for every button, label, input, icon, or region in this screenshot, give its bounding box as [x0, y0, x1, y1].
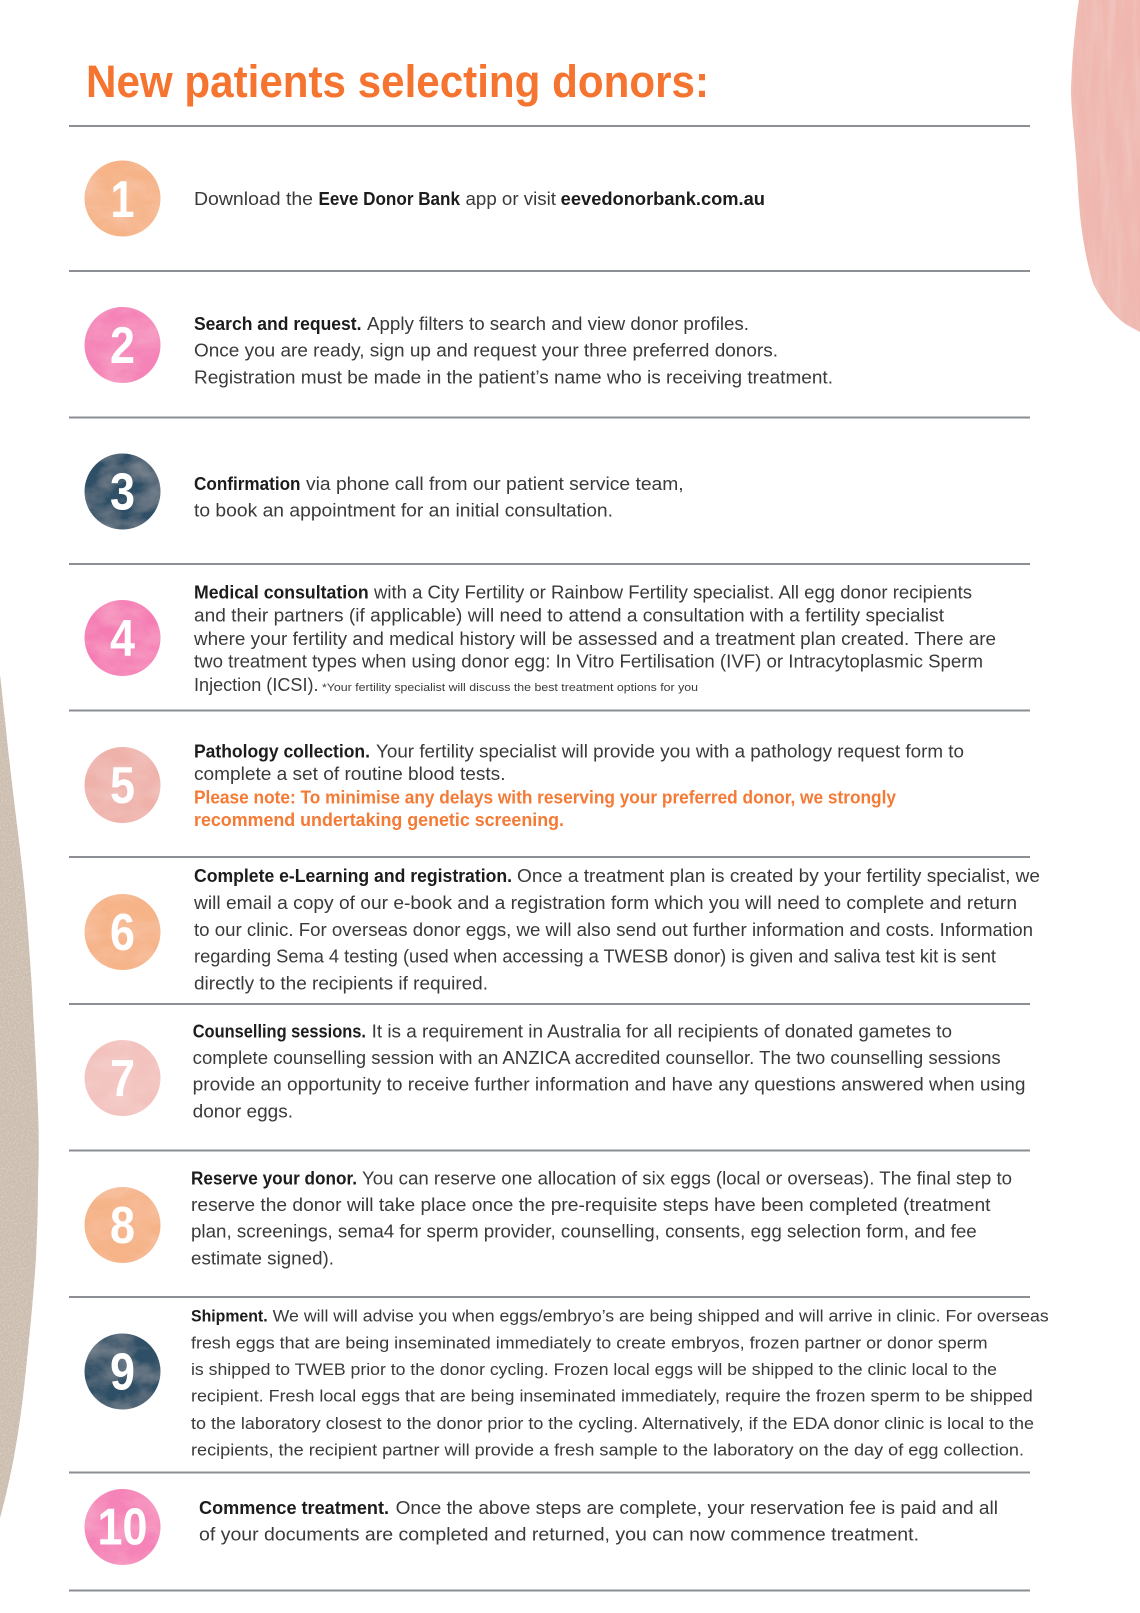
icon: number 2 badge [84, 307, 160, 383]
icon: number 4 badge [84, 600, 160, 676]
text block: step 9 shipment: Shipment. [191, 1306, 268, 1325]
icon: number 5 badge [84, 747, 160, 823]
text block: step 5 pathology collection: Pathology collection. [194, 741, 370, 761]
text block: step 2 search and request: Search and request. [194, 314, 362, 334]
panel: step 8 [84, 1168, 1012, 1268]
text block: step 7 counselling sessions: It is a requirement in Australia for all recipients of donated gametes to [372, 1021, 952, 1041]
text block: step 5 pathology collection [194, 741, 964, 830]
background shape: pink blob top right [1071, 0, 1140, 332]
text block: step 6 e-learning and registration [193, 866, 1040, 993]
icon: number 7 badge [84, 1040, 160, 1116]
text block: step 1 download [194, 189, 765, 209]
text block: step 6 e-learning and registration: regarding Sema 4 testing (used when accessing a TWESB donor) is given and saliva test kit is sent [194, 947, 996, 967]
text block: step 10 commence treatment: Commence treatment. [199, 1498, 389, 1518]
icon: number 4 badge: 4 [110, 610, 135, 668]
text block: step 4 medical consultation: Medical consultation [194, 582, 369, 602]
panel: step 6 [84, 866, 1040, 993]
text block: step 8 reserve your donor: estimate signed). [191, 1248, 334, 1268]
text block: step 6 e-learning and registration: to our clinic. For overseas donor eggs, we will also send out further information and costs. Information [194, 920, 1033, 940]
text block: step 9 shipment: recipient. Fresh local eggs that are being inseminated immediately, require the frozen sperm to be shipped [191, 1387, 1033, 1406]
text block: step 4 medical consultation: with a City Fertility or Rainbow Fertility specialist. All egg donor recipients [373, 582, 972, 602]
text block: step 4 medical consultation: *Your fertility specialist will discuss the best treatment options for you [322, 682, 698, 694]
title: New patients selecting donors: [86, 56, 709, 107]
text block: step 7 counselling sessions: provide an opportunity to receive further information and have any questions answered when using [193, 1075, 1025, 1095]
icon: number 3 badge: 3 [110, 464, 135, 522]
text block: step 5 pathology collection: Your fertility specialist will provide you with a pathology request form to [376, 741, 964, 761]
panel: step 9 [84, 1306, 1049, 1460]
text block: step 2 search and request: Once you are ready, sign up and request your three preferred donors. [194, 341, 778, 361]
text block: step 2 search and request: Apply filters to search and view donor profiles. [367, 314, 749, 334]
text block: step 3 confirmation: via phone call from our patient service team, [306, 474, 684, 494]
icon: number 10 badge: 10 [98, 1498, 148, 1556]
text block: step 2 search and request [194, 314, 833, 388]
text block: step 7 counselling sessions [193, 1021, 1025, 1121]
panel: step 10 [84, 1489, 998, 1565]
text block: step 6 e-learning and registration: Once a treatment plan is created by your fertility specialist, we [517, 866, 1040, 886]
text block: step 1 download: Eeve Donor Bank [318, 189, 461, 209]
callout: genetic screening note: Please note: To minimise any delays with reserving your preferred donor, we strongly [194, 787, 896, 807]
callout: genetic screening note: recommend undertaking genetic screening. [194, 810, 564, 830]
text block: step 8 reserve your donor: You can reserve one allocation of six eggs (local or overseas). The final step to [362, 1168, 1012, 1188]
text block: step 3 confirmation: to book an appointment for an initial consultation. [194, 501, 613, 521]
panel: step 1 [84, 160, 765, 236]
text block: step 9 shipment: recipients, the recipient partner will provide a fresh sample to the laboratory on the day of egg collection. [191, 1441, 1024, 1460]
icon: number 5 badge: 5 [110, 757, 135, 815]
text block: step 6 e-learning and registration: Complete e-Learning and registration. [194, 866, 512, 886]
text block: step 6 e-learning and registration: will email a copy of our e-book and a registration form which you will need to complete and return [193, 893, 1017, 913]
text block: step 7 counselling sessions: complete counselling session with an ANZICA accredited counsellor. The two counselling sessions [193, 1048, 1001, 1068]
text block: step 9 shipment: We will will advise you when eggs/embryo’s are being shipped and will arrive in clinic. For overseas [273, 1306, 1049, 1325]
icon: number 9 badge [84, 1334, 160, 1410]
icon: number 8 badge [84, 1187, 160, 1263]
icon: number 7 badge: 7 [110, 1050, 135, 1108]
text block: step 6 e-learning and registration: directly to the recipients if required. [194, 973, 488, 993]
text block: step 7 counselling sessions: Counselling sessions. [193, 1021, 366, 1041]
text block: step 10 commence treatment: Once the above steps are complete, your reservation fee is paid and all [396, 1498, 998, 1518]
text block: step 1 download: app or visit [466, 189, 556, 209]
text block: step 9 shipment: fresh eggs that are being inseminated immediately to create embryos, frozen partner or donor sperm [191, 1333, 988, 1352]
icon: number 8 badge: 8 [110, 1197, 135, 1255]
background shape: beige blob left edge [0, 675, 39, 1518]
panel: step 5 [84, 741, 964, 830]
icon: number 6 badge: 6 [110, 904, 135, 962]
icon: number 10 badge [84, 1489, 160, 1565]
text block: step 9 shipment: is shipped to TWEB prior to the donor cycling. Frozen local eggs will be shipped to the clinic local to the [191, 1360, 997, 1379]
text block: step 5 pathology collection: complete a set of routine blood tests. [194, 764, 506, 784]
text block: step 10 commence treatment: of your documents are completed and returned, you can now commence treatment. [199, 1525, 919, 1545]
text block: step 2 search and request: Registration must be made in the patient’s name who is receiving treatment. [194, 368, 833, 388]
text block: step 8 reserve your donor [191, 1168, 1012, 1268]
text block: step 3 confirmation [194, 474, 684, 521]
panel: step 7 [84, 1021, 1026, 1121]
callout: genetic screening note [194, 787, 896, 830]
text block: step 8 reserve your donor: plan, screenings, sema4 for sperm provider, counselling, consents, egg selection form, and fee [191, 1222, 977, 1242]
panel: step 4 [84, 582, 996, 695]
text block: step 1 download: Download the [194, 189, 313, 209]
text block: step 4 medical consultation: and their partners (if applicable) will need to attend a consultation with a fertility specialist [194, 606, 944, 626]
text block: step 7 counselling sessions: donor eggs. [193, 1101, 293, 1121]
panel: step 3 [84, 454, 684, 530]
text block: step 4 medical consultation: where your fertility and medical history will be assessed and a treatment plan created. There are [193, 629, 996, 649]
text block: step 10 commence treatment [199, 1498, 998, 1545]
text block: step 4 medical consultation: two treatment types when using donor egg: In Vitro Fertilisation (IVF) or Intracytoplasmic Sperm [194, 652, 983, 672]
text block: step 8 reserve your donor: reserve the donor will take place once the pre-requisite steps have been completed (treatment [191, 1195, 990, 1215]
panel: step 2 [84, 307, 833, 388]
text block: step 1 download: eevedonorbank.com.au [561, 189, 765, 209]
text block: step 4 medical consultation: Injection (ICSI). [194, 675, 318, 695]
text block: step 9 shipment: to the laboratory closest to the donor prior to the cycling. Alternatively, if the EDA donor clinic is local to the [191, 1414, 1034, 1433]
icon: number 2 badge: 2 [110, 317, 135, 375]
icon: number 3 badge [84, 454, 160, 530]
text block: step 3 confirmation: Confirmation [194, 474, 300, 494]
icon: number 9 badge: 9 [110, 1344, 135, 1402]
icon: number 6 badge [84, 894, 160, 970]
icon: number 1 badge: 1 [110, 171, 134, 229]
icon: number 1 badge [84, 160, 160, 236]
text block: step 9 shipment [191, 1306, 1049, 1460]
text block: step 4 medical consultation [193, 582, 996, 695]
text block: step 8 reserve your donor: Reserve your donor. [191, 1168, 357, 1188]
